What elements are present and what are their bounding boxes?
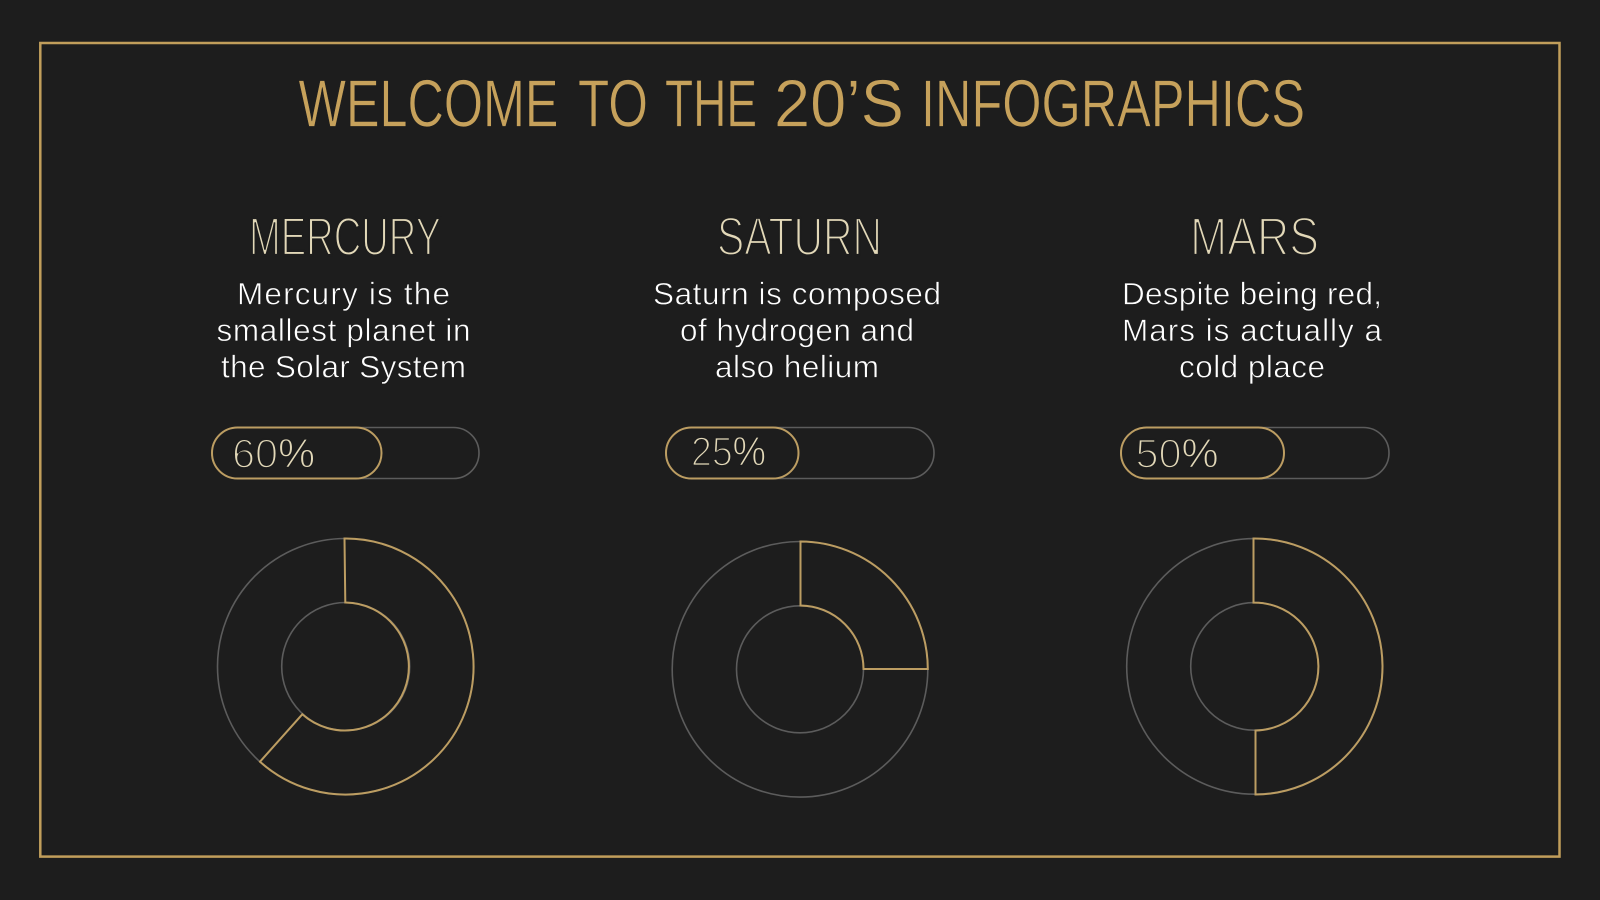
- donut chart: 50%: [1127, 538, 1383, 794]
- text block: mars description: Mars is actually a: [1122, 312, 1382, 348]
- text block: mercury description: [216, 275, 470, 385]
- donut chart: 60%: [218, 538, 474, 794]
- progress bar: 25%: [666, 428, 934, 478]
- progress bar: 60%: 60%: [232, 430, 315, 476]
- text block: mars description: Despite being red,: [1122, 275, 1382, 311]
- heading: mars: MARS: [1190, 207, 1319, 267]
- text block: saturn description: of hydrogen and: [680, 312, 914, 348]
- heading: saturn: SATURN: [717, 207, 882, 267]
- progress bar: 25%: 25%: [691, 428, 766, 474]
- title: THE: [665, 66, 757, 142]
- donut chart: 25%: [672, 542, 928, 797]
- title: 20’S: [774, 66, 904, 142]
- title: INFOGRAPHICS: [921, 66, 1305, 142]
- progress bar: 50%: 50%: [1136, 430, 1218, 476]
- title: WELCOME: [298, 66, 558, 142]
- text block: saturn description: Saturn is composed: [653, 275, 941, 311]
- panel: saturn: [653, 207, 941, 797]
- title: [298, 66, 1305, 142]
- progress bar: 50%: [1121, 428, 1389, 478]
- progress bar: 60%: [212, 428, 479, 478]
- text block: saturn description: also helium: [715, 349, 879, 385]
- text block: mercury description: the Solar System: [221, 349, 466, 385]
- text block: saturn description: [653, 275, 941, 385]
- text block: mars description: cold place: [1179, 349, 1325, 385]
- heading: mercury: MERCURY: [249, 207, 441, 267]
- text block: mars description: [1122, 275, 1382, 385]
- panel: mercury: [212, 207, 479, 794]
- panel: mars: [1121, 207, 1389, 794]
- title: TO: [578, 66, 648, 142]
- text block: mercury description: Mercury is the: [237, 275, 450, 311]
- text block: mercury description: smallest planet in: [216, 312, 470, 348]
